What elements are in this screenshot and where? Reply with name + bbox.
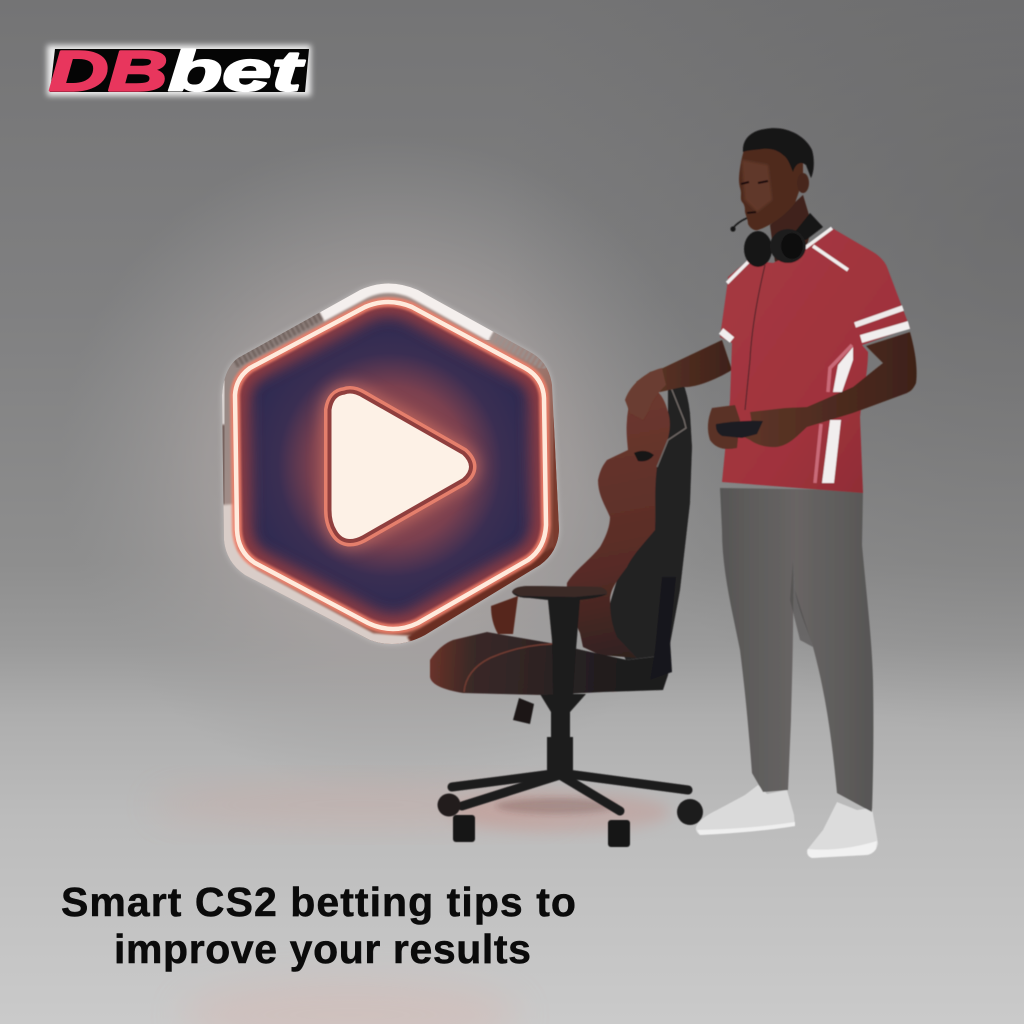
rim highlights [222, 280, 562, 648]
chair lever [513, 698, 534, 724]
seat piping [464, 644, 552, 692]
headset mic [733, 218, 747, 228]
chair side highlight [657, 385, 686, 467]
gaming chair [430, 380, 703, 847]
badge outer glow [222, 284, 559, 644]
shirt details [721, 228, 909, 483]
trouser shading [790, 560, 813, 647]
chair armrest [512, 586, 607, 697]
face [739, 146, 803, 230]
far arm [636, 340, 732, 392]
logo text: DB: DB [49, 39, 168, 103]
neck [770, 195, 812, 262]
icon: glowing hexagon play badge [222, 280, 562, 648]
shoes [696, 785, 878, 858]
chair backrest red cushion [567, 389, 670, 658]
chair base and casters [438, 773, 703, 847]
left hand [708, 405, 740, 449]
logo: DBbet [47, 39, 311, 103]
badge metal rim [222, 284, 559, 644]
chair backrest black shell [605, 380, 692, 660]
trousers [720, 488, 873, 812]
hair [743, 128, 814, 178]
neon ring [235, 302, 546, 629]
chair strut behind badge [491, 596, 518, 634]
armrest top [512, 586, 607, 597]
hand on chair [625, 368, 666, 420]
eyes and mouth [741, 181, 768, 213]
game controller [716, 421, 763, 438]
ear [797, 173, 809, 193]
title: Smart CS2 betting tips to improve your results: Smart CS2 betting tips to [61, 879, 577, 925]
badge dark panel [235, 302, 546, 629]
play triangle [332, 394, 468, 539]
chair right strap [650, 577, 676, 680]
cheek light [742, 160, 772, 212]
headset [730, 213, 823, 267]
logo text: bet: bet [168, 39, 305, 103]
shirt [720, 228, 910, 493]
chair gas lift and mechanism [540, 694, 586, 771]
title: Smart CS2 betting tips to improve your results: improve your results [114, 926, 532, 972]
man: standing gamer [625, 128, 917, 858]
panel inner edge glow [235, 302, 546, 629]
head [739, 128, 814, 230]
near arm [740, 332, 917, 447]
chair seat [430, 632, 670, 695]
chair headrest slot [634, 451, 654, 461]
title: Smart CS2 betting tips to improve your results [61, 879, 577, 972]
